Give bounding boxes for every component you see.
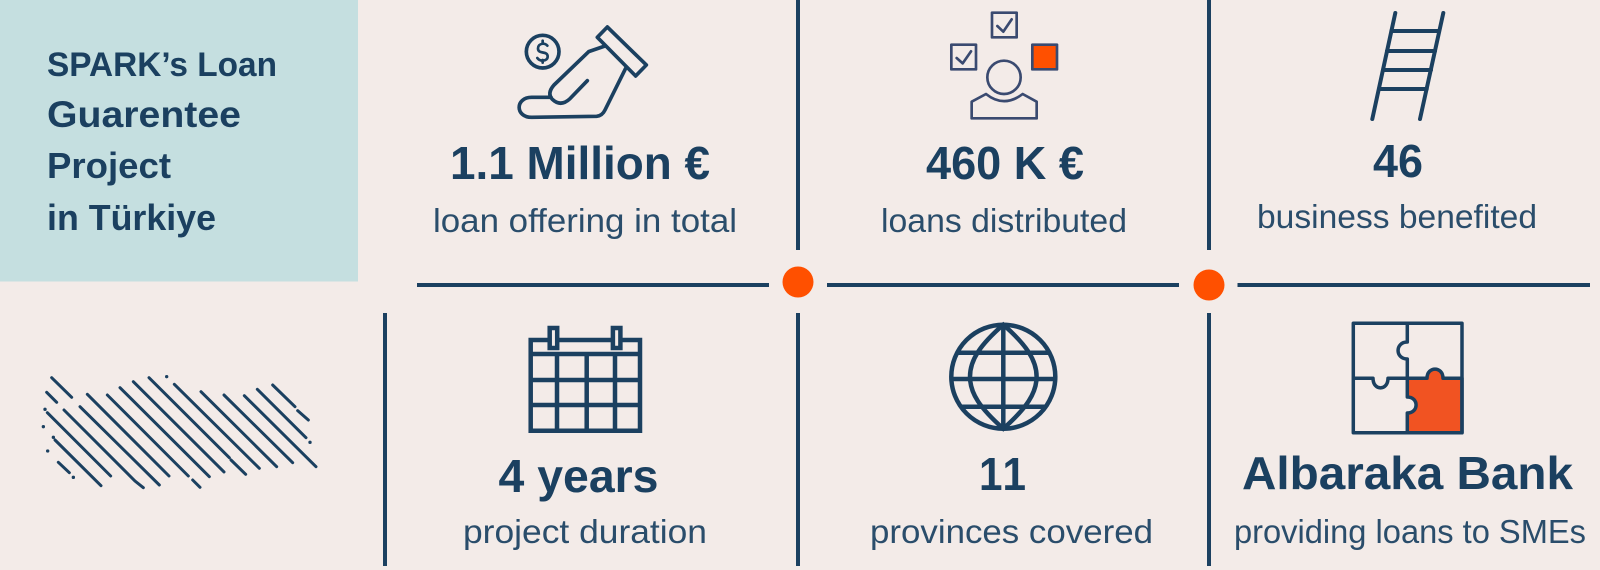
title panel: SPARK’s Loan	[47, 46, 277, 84]
title panel: Project	[47, 145, 171, 186]
stat: Albaraka Bank	[1234, 323, 1586, 550]
icon: puzzle with orange piece	[1353, 323, 1462, 433]
stat: project duration: project duration	[463, 513, 707, 550]
icon: hatched map of Türkiye	[43, 377, 316, 488]
stat: project duration	[463, 328, 707, 550]
icon: globe	[951, 325, 1055, 429]
stat: Albaraka Bank: providing loans to SMEs	[1234, 513, 1586, 550]
stat: Albaraka Bank: Albaraka Bank	[1242, 447, 1573, 499]
orange dot left	[782, 266, 814, 298]
stat: project duration: 4 years	[498, 450, 658, 502]
stat: provinces covered: 11	[979, 448, 1026, 500]
icon: calendar	[531, 328, 640, 431]
title panel	[0, 0, 358, 282]
stat: loans distributed	[881, 13, 1127, 239]
stat: loan offering	[433, 27, 737, 239]
stat: loan offering: loan offering in total	[433, 202, 737, 239]
icon: hand with coin	[519, 27, 646, 117]
stat: provinces covered	[870, 325, 1153, 550]
stat: loans distributed: loans distributed	[881, 202, 1127, 239]
icon: ladder	[1372, 13, 1443, 119]
stat: loan offering: 1.1 Million €	[450, 137, 710, 189]
icon: person with checkboxes	[951, 13, 1057, 118]
stat: loans distributed: 460 K €	[926, 137, 1084, 189]
title panel: Guarentee	[47, 94, 241, 135]
title panel: in Türkiye	[47, 197, 216, 238]
stat: business benefited	[1257, 13, 1537, 235]
stat: provinces covered: provinces covered	[870, 513, 1153, 550]
stat: business benefited: 46	[1373, 135, 1423, 187]
grid dividers	[383, 0, 1590, 566]
orange dot right	[1194, 270, 1224, 300]
stat: business benefited: business benefited	[1257, 198, 1537, 235]
